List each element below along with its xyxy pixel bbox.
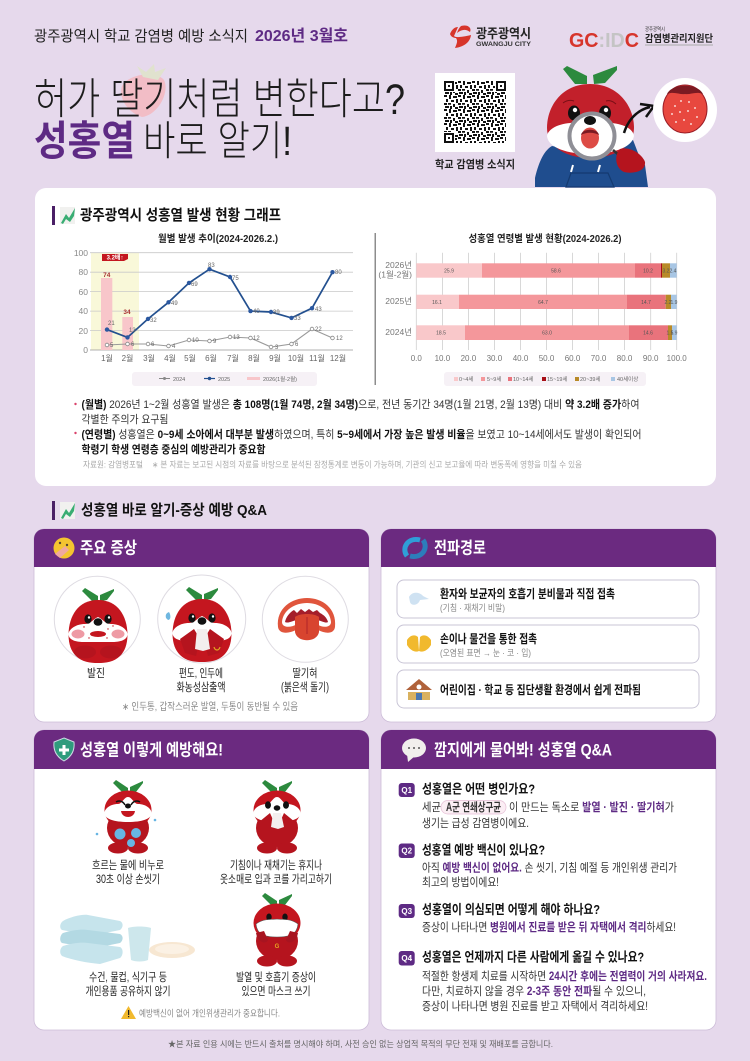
line chart: monthly <box>74 232 353 386</box>
logo: GC:DC: 광주광역시 <box>645 25 665 33</box>
findings text: (월별) 2026년 1~2월 성홍열 발생은 총 108명(1월 74명, 2월 34명)으로, 전년 동기간 34명(1월 21명, 2월 13명) 대비 약 3.2배 증가하여 <box>82 397 640 411</box>
stacked bar chart: age: 64.7 <box>538 300 548 306</box>
stacked bar chart: age: 0.0 <box>411 354 422 363</box>
route: group settings <box>397 670 699 708</box>
panel: transmission routes <box>381 529 716 722</box>
Q4 <box>399 950 707 1013</box>
logo: GC:DC: 감염병관리지원단 <box>645 32 713 45</box>
stacked bar chart: age: 10.0 <box>435 354 451 363</box>
line chart: monthly: 69 <box>191 282 198 288</box>
line chart: monthly: 9 <box>213 339 217 345</box>
stacked bar chart: age: 16.1 <box>432 300 442 306</box>
stacked bar chart: age: 18.5 <box>436 330 446 336</box>
line chart: monthly: 75 <box>232 276 239 282</box>
logo: Gwangju city: GWANGJU CITY <box>476 41 532 48</box>
line chart: monthly: 13 <box>233 335 240 341</box>
line chart: monthly: 40 <box>253 309 260 315</box>
line chart: monthly: 100 <box>74 248 88 258</box>
findings text <box>74 397 642 470</box>
line chart: monthly: 6월 <box>205 353 217 363</box>
route: droplets <box>397 580 699 618</box>
heading: routes: 전파경로 <box>434 538 486 558</box>
section heading: graph: 광주광역시 성홍열 발생 현황 그래프 <box>80 207 281 224</box>
title <box>34 76 405 164</box>
line chart: monthly: 2025 <box>218 377 230 383</box>
header line: 광주광역시 학교 감염병 예방 소식지 <box>34 28 248 45</box>
stacked bar chart: age: 40.0 <box>513 354 529 363</box>
stacked bar chart: age: 50.0 <box>539 354 555 363</box>
line chart: monthly: 6 <box>151 342 155 348</box>
icon: shield <box>54 738 74 761</box>
Q1: 생기는 급성 감염병이에요. <box>422 817 529 830</box>
panel: Q&A <box>381 730 716 1030</box>
line chart: monthly: 21 <box>108 321 115 327</box>
stacked bar chart: age: 3.2 <box>663 268 670 274</box>
logo: GC:DC <box>569 25 713 52</box>
decorative strawberry <box>121 64 166 117</box>
stacked bar chart: age: 5~9세 <box>487 375 501 383</box>
stacked bar chart: age: 1.9 <box>671 300 678 306</box>
heading: Q&A: 깜지에게 물어봐! 성홍열 Q&A <box>434 740 612 760</box>
Q2: 성홍열 예방 백신이 있나요? <box>422 842 545 858</box>
section heading: Q&A: 성홍열 바로 알기-증상 예방 Q&A <box>81 502 267 519</box>
line chart: monthly: 39 <box>273 310 280 316</box>
stacked bar chart: age: 2026년 <box>385 260 412 270</box>
tip: mask: 있으면 마스크 쓰기 <box>242 985 310 998</box>
Q2 <box>399 842 677 889</box>
tip: personal items: 수건, 물컵, 식기구 등 <box>89 971 167 984</box>
Q4: 다만, 치료하지 않을 경우 2-3주 동안 전파될 수 있으니, <box>422 984 646 998</box>
title: 바로 알기! <box>143 118 292 164</box>
route: droplets: (기침 · 재채기 비말) <box>440 602 505 613</box>
line chart: monthly: 2024 <box>173 377 185 383</box>
tip: mask <box>236 893 316 998</box>
symptom: tonsil exudate: 화농성삼출액 <box>176 681 226 694</box>
heading: prevention: 성홍열 이렇게 예방해요! <box>80 740 223 760</box>
stacked bar chart: age: 25.9 <box>444 268 454 274</box>
line chart: monthly: 9월 <box>269 353 281 363</box>
findings text: 각별한 주의가 요구됨 <box>82 413 168 426</box>
stacked bar chart: age: 0~4세 <box>459 375 473 383</box>
symptom: rash <box>54 576 140 680</box>
symptom: strawberry tongue: (붉은색 돌기) <box>281 681 329 694</box>
line chart: monthly: 6 <box>295 342 299 348</box>
findings text: ∗ 본 자료는 보고된 시점의 자료를 바탕으로 분석된 잠정통계로 변동이 가능하며, 기관의 신고 보고율에 따라 변동폭에 영향을 미칠 수 있음 <box>152 460 582 470</box>
line chart: monthly: 10 <box>192 338 199 344</box>
stacked bar chart: age: 80.0 <box>617 354 633 363</box>
findings text: 자료원: 감염병포털 <box>83 460 143 470</box>
stacked bar chart: age: 10.2 <box>643 268 653 274</box>
line chart: monthly: 4 <box>172 344 176 350</box>
stacked bar chart: age: 14.6 <box>643 330 653 336</box>
stacked bar chart: age: 14.7 <box>641 300 651 306</box>
line chart: monthly: 4월 <box>164 353 176 363</box>
warning note <box>121 1006 280 1019</box>
Q4: 적절한 항생제 치료를 시작하면 24시간 후에는 전염력이 거의 사라져요. <box>422 969 707 983</box>
line chart: monthly: 1월 <box>101 353 113 363</box>
icon: speech bubble <box>402 738 426 762</box>
logo: Gwangju city <box>450 25 532 48</box>
line chart: monthly: 0 <box>83 345 88 355</box>
Q1: A군 연쇄상구균 <box>446 801 501 814</box>
panel: main symptoms <box>34 529 369 722</box>
stacked bar chart: age: 70.0 <box>591 354 607 363</box>
stacked bar chart: age: 15~19세 <box>547 375 568 383</box>
logo: Gwangju city: 광주광역시 <box>476 26 531 41</box>
Q2: 아직 예방 백신이 없어요. 손 씻기, 기침 예절 등 개인위생 관리가 <box>422 860 677 874</box>
stacked bar chart: age: 2024년 <box>385 327 412 337</box>
line chart: monthly: 2026(1월-2월) <box>263 375 297 383</box>
line chart: monthly: 34 <box>123 309 131 316</box>
line chart: monthly: 32 <box>150 318 157 324</box>
stacked bar chart: age: 성홍열 연령별 발생 현황(2024-2026.2) <box>468 232 622 245</box>
heading: main symptoms: 주요 증상 <box>80 538 137 558</box>
Q1 <box>399 782 674 830</box>
tip: hand washing: 흐르는 물에 비누로 <box>92 859 164 872</box>
logo: GC:DC: GC:IDC <box>569 30 639 52</box>
line chart: monthly: 13 <box>129 328 136 334</box>
line chart: monthly: 7월 <box>227 353 239 363</box>
symptom: rash: 발진 <box>87 667 105 680</box>
stacked bar chart: age: 20.0 <box>461 354 477 363</box>
symptom: tonsil exudate: 편도, 인두에 <box>179 667 223 680</box>
Q3: Q3 <box>401 907 413 916</box>
route: group settings: 어린이집 · 학교 등 집단생활 환경에서 쉽게 전파됨 <box>440 682 641 697</box>
symptom: strawberry tongue <box>262 576 348 694</box>
panel: graph <box>35 188 716 486</box>
stacked bar chart: age: 20~39세 <box>580 375 601 383</box>
stacked bar chart: age: 2.2 <box>665 300 672 306</box>
line chart: monthly: 43 <box>315 307 322 313</box>
findings text: (연령별) 성홍열은 0~9세 소아에서 대부분 발생하였으며, 특히 5~9세에서 가장 높은 발생 비율을 보였고 10~14세에서도 발생이 확인되어 <box>82 427 642 441</box>
route: droplets: 환자와 보균자의 호흡기 분비물과 직접 접촉 <box>440 586 615 601</box>
line chart: monthly: 60 <box>79 287 88 297</box>
Q1: 성홍열은 어떤 병인가요? <box>422 782 535 796</box>
line chart: monthly: 5 <box>110 343 114 349</box>
line chart: monthly: 10월 <box>288 353 304 363</box>
tip: mask: G <box>275 944 280 950</box>
tip: mask: 발열 및 호흡기 증상이 <box>236 970 316 984</box>
Q3: 성홍열이 의심되면 어떻게 해야 하나요? <box>422 902 600 917</box>
Q4: 증상이 나타나면 병원 진료를 받고 자택에서 격리하세요! <box>422 999 648 1013</box>
route: hands: (오염된 표면 → 눈 · 코 · 입) <box>440 647 531 658</box>
line chart: monthly: 6 <box>131 342 135 348</box>
line chart: monthly: 3월 <box>143 353 155 363</box>
tip: hand washing <box>92 780 164 886</box>
line chart: monthly: 74 <box>103 272 111 279</box>
stacked bar chart: age: 100.0 <box>667 354 687 363</box>
line chart: monthly: 2월 <box>122 353 133 363</box>
line chart: monthly: 83 <box>208 263 215 269</box>
stacked bar chart: age: (1월-2월) <box>378 270 412 280</box>
Q1: 세균 <box>422 801 441 814</box>
stacked bar chart: age: 1.5 <box>667 330 674 336</box>
tip: cough etiquette: 기침이나 재채기는 휴지나 <box>230 859 322 872</box>
line chart: monthly: 11월 <box>309 353 325 363</box>
route: hands: 손이나 물건을 통한 접촉 <box>440 631 537 646</box>
panel: prevention <box>34 730 369 1030</box>
stacked bar chart: age: 58.6 <box>551 268 561 274</box>
route: hands <box>397 625 699 663</box>
tip: cough etiquette: 옷소매로 입과 코를 가리고하기 <box>220 872 332 886</box>
stacked bar chart: age: 1.9 <box>671 330 678 336</box>
line chart: monthly: 12 <box>253 336 260 342</box>
divider <box>374 233 376 385</box>
title: 허가 딸기처럼 변한다고? <box>34 76 405 124</box>
line chart: monthly: 3 <box>275 345 279 351</box>
Q2: 최고의 방법이에요! <box>422 876 499 889</box>
line chart: monthly: 8월 <box>248 353 260 363</box>
line chart: monthly: 40 <box>79 306 88 316</box>
tip: personal items <box>60 915 195 998</box>
line chart: monthly: 20 <box>79 326 88 336</box>
stacked bar chart: age: 30.0 <box>487 354 503 363</box>
Q1: Q1 <box>401 786 413 795</box>
title: 성홍열 <box>34 118 135 164</box>
tip: hand washing: 30초 이상 손씻기 <box>96 873 160 886</box>
QR code <box>435 73 515 171</box>
stacked bar chart: age: 63.0 <box>542 330 552 336</box>
stacked bar chart: age: 2025년 <box>385 296 412 306</box>
stacked bar chart: age: 2.4 <box>670 268 677 274</box>
QR code: 학교 감염병 소식지 <box>435 157 515 171</box>
line chart: monthly: 22 <box>315 327 322 333</box>
symptom: strawberry tongue: 딸기혀 <box>292 666 318 680</box>
stacked bar chart: age: 60.0 <box>565 354 581 363</box>
Q4: 성홍열은 언제까지 다른 사람에게 옮길 수 있나요? <box>422 950 644 964</box>
icon: refresh arrows <box>405 539 425 557</box>
Q2: Q2 <box>401 846 413 856</box>
line chart: monthly: 33 <box>294 316 301 322</box>
symptoms note: ∗ 인두통, 갑작스러운 발열, 두통이 동반될 수 있음 <box>122 701 298 713</box>
symptom: tonsil exudate <box>158 575 246 694</box>
header line: 2026년 3월호 <box>255 27 348 45</box>
line chart: monthly: 3.2배↑ <box>107 254 123 262</box>
line chart: monthly: 월별 발생 추이(2024-2026.2.) <box>158 232 278 245</box>
line chart: monthly: 12월 <box>330 353 346 363</box>
findings text: 학령기 학생 연령층 중심의 예방관리가 중요함 <box>82 442 266 456</box>
stacked bar chart: age: 10~14세 <box>513 375 534 383</box>
Q4: Q4 <box>401 954 413 963</box>
Q1: 이 만드는 독소로 발열 · 발진 · 딸기혀가 <box>509 800 674 814</box>
main mascot with magnifier <box>535 66 717 187</box>
stacked bar chart: age: 90.0 <box>643 354 659 363</box>
line chart: monthly: 12 <box>336 336 343 342</box>
line chart: monthly: 5월 <box>184 353 196 363</box>
icon: sick face <box>54 538 74 558</box>
tip: personal items: 개인용품 공유하지 않기 <box>86 984 170 998</box>
Q3: 증상이 나타나면 병원에서 진료를 받은 뒤 자택에서 격리하세요! <box>422 920 676 934</box>
Q3 <box>399 902 676 934</box>
warning note: 예방백신이 없어 개인위생관리가 중요합니다. <box>139 1008 280 1018</box>
stacked bar chart: age <box>378 232 687 386</box>
line chart: monthly: 80 <box>335 270 342 276</box>
tip: cough etiquette <box>220 780 332 886</box>
footer note: ★본 자료 인용 시에는 반드시 출처를 명시해야 하며, 사전 승인 없는 상업적 목적의 무단 전재 및 재배포를 금합니다. <box>168 1039 553 1049</box>
stacked bar chart: age: 40세이상 <box>617 375 638 383</box>
header line <box>34 27 348 45</box>
line chart: monthly: 80 <box>79 267 88 277</box>
line chart: monthly: 49 <box>171 301 178 307</box>
